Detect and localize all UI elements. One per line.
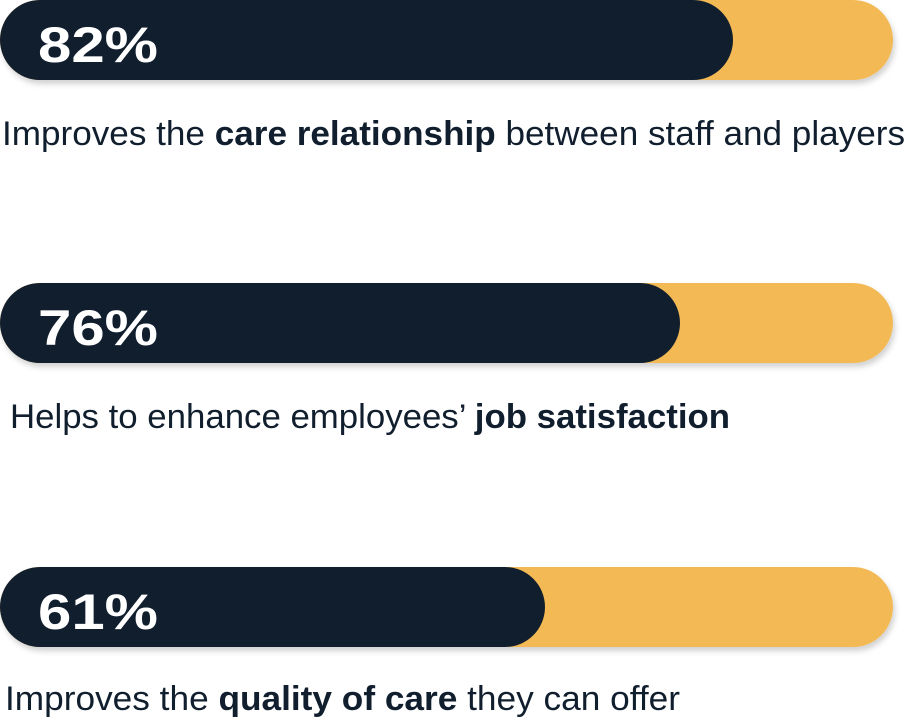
bar 1: 82% bbox=[0, 0, 893, 80]
bar 3: 61%: 61% bbox=[38, 584, 158, 640]
bar 3: 61% bbox=[0, 567, 893, 647]
label 2: Helps to enhance employees’ job satisfaction bbox=[10, 398, 730, 436]
label 3: Improves the quality of care they can offer bbox=[5, 680, 680, 718]
bar 2: 76% bbox=[0, 283, 893, 363]
bar 1: 82%: 82% bbox=[38, 17, 158, 73]
bar 2: 76%: 76% bbox=[38, 300, 158, 356]
label 1: Improves the care relationship between staff and players bbox=[2, 115, 905, 153]
